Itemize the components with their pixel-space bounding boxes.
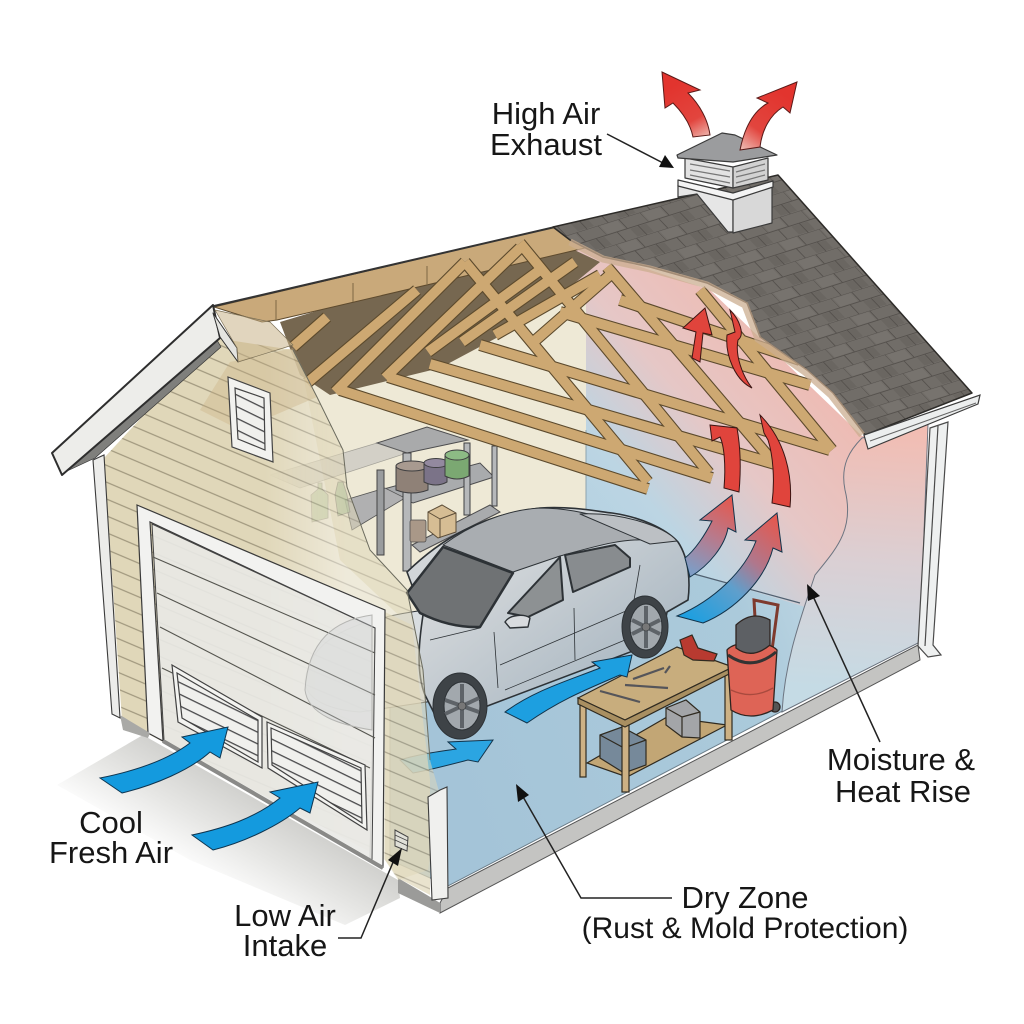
blue to red arrow 2 xyxy=(677,513,782,623)
truss dark outlines xyxy=(293,243,832,489)
shop vacuum xyxy=(727,600,780,716)
leader arrow: low air intake xyxy=(338,848,402,938)
label: dry zone: (Rust & Mold Protection) xyxy=(582,912,908,945)
side windows xyxy=(508,557,563,617)
concrete slab xyxy=(398,645,920,913)
ghost car through door xyxy=(305,615,372,730)
exterior cool air arrows xyxy=(100,727,318,850)
storage shelves xyxy=(270,427,500,571)
label: dry zone: Dry Zone xyxy=(682,880,808,915)
blue to red arrow 1 xyxy=(685,495,736,577)
front siding wall xyxy=(104,338,440,880)
exhaust arrow left xyxy=(662,72,710,137)
downspout xyxy=(918,422,948,657)
car body xyxy=(407,508,689,725)
gutter xyxy=(864,395,980,449)
rear wheel xyxy=(622,596,668,658)
gable fascia xyxy=(52,305,293,475)
stacked items xyxy=(410,520,426,542)
paint cans on shelf xyxy=(396,450,469,493)
cupola collar xyxy=(678,180,773,200)
body lines xyxy=(430,565,640,690)
cupola exhaust vent xyxy=(677,133,777,233)
exhaust arrows xyxy=(662,72,797,150)
siding right strip xyxy=(385,612,430,895)
workbench xyxy=(578,635,733,792)
label: moisture and heat rise: Moisture & xyxy=(827,742,975,777)
label: cool fresh air xyxy=(49,805,173,870)
garage floor dry zone xyxy=(390,570,918,886)
right corner trim xyxy=(428,787,448,900)
mirror xyxy=(505,615,530,628)
leader arrow: high air exhaust xyxy=(607,134,674,168)
cool air arrow lower xyxy=(192,782,318,850)
roof trusses xyxy=(293,243,832,489)
cupola base right xyxy=(733,187,772,233)
windshield xyxy=(407,547,513,627)
label: low air intake: Intake xyxy=(243,928,327,963)
car roof xyxy=(443,508,650,572)
roof cut edge sheathing xyxy=(570,242,862,435)
heat arrow lower right xyxy=(760,415,791,507)
label: moisture and heat rise: Heat Rise xyxy=(835,774,971,809)
red vise xyxy=(680,635,717,661)
label: low air intake xyxy=(234,898,336,963)
front wheel xyxy=(433,673,487,739)
corner trim left xyxy=(93,455,120,718)
attic ghost through gable xyxy=(200,348,317,430)
shingled roof xyxy=(553,175,972,435)
door left louver xyxy=(172,665,262,768)
door threshold xyxy=(163,741,383,868)
label: high air exhaust: Exhaust xyxy=(490,127,602,162)
wall bottom footing xyxy=(120,715,150,738)
heat arrow lower left xyxy=(710,425,740,492)
truss wood faces xyxy=(293,243,832,489)
rising heat arrows in attic xyxy=(683,308,791,507)
label: moisture and heat rise xyxy=(827,742,975,809)
exhaust arrow right xyxy=(740,82,797,150)
right end wall translucent pane xyxy=(782,424,928,712)
attic dark underside xyxy=(280,240,600,395)
label: cool fresh air: Fresh Air xyxy=(49,835,173,870)
label: high air exhaust xyxy=(490,96,602,162)
translucent cut edge xyxy=(293,350,430,760)
arrow by wall xyxy=(400,740,493,773)
green bottles xyxy=(311,482,350,522)
interior back walls xyxy=(290,240,928,642)
gable end vent xyxy=(228,377,273,462)
label: low air intake: Low Air xyxy=(234,898,336,933)
cupola louvers left xyxy=(685,158,733,188)
ground shadow in front of door xyxy=(57,735,400,925)
cupola cap xyxy=(677,133,777,162)
label: cool fresh air: Cool xyxy=(79,805,143,840)
garage door xyxy=(152,524,375,860)
rear deck xyxy=(580,514,677,544)
garage door frame xyxy=(137,505,385,867)
door right louver xyxy=(267,722,367,830)
ridge beam band xyxy=(214,226,585,322)
cardboard boxes xyxy=(428,505,456,538)
label: high air exhaust: High Air xyxy=(492,96,600,131)
arrow under car xyxy=(505,655,632,723)
heat arrow upper right xyxy=(727,310,752,388)
car ghost front xyxy=(305,610,470,712)
car xyxy=(305,508,689,739)
hand tools xyxy=(600,666,670,702)
floor airflow arrows xyxy=(400,495,782,773)
leader arrow: dry zone xyxy=(516,784,672,898)
heat arrow upper left xyxy=(683,308,712,362)
cupola louvers right xyxy=(733,158,768,188)
toolbox xyxy=(600,727,646,773)
battery xyxy=(666,700,700,738)
cool air arrow upper xyxy=(100,727,228,793)
low intake vent xyxy=(395,830,408,851)
cupola base left xyxy=(678,185,733,232)
leader arrow: moisture xyxy=(807,584,880,742)
label: dry zone xyxy=(582,880,908,945)
